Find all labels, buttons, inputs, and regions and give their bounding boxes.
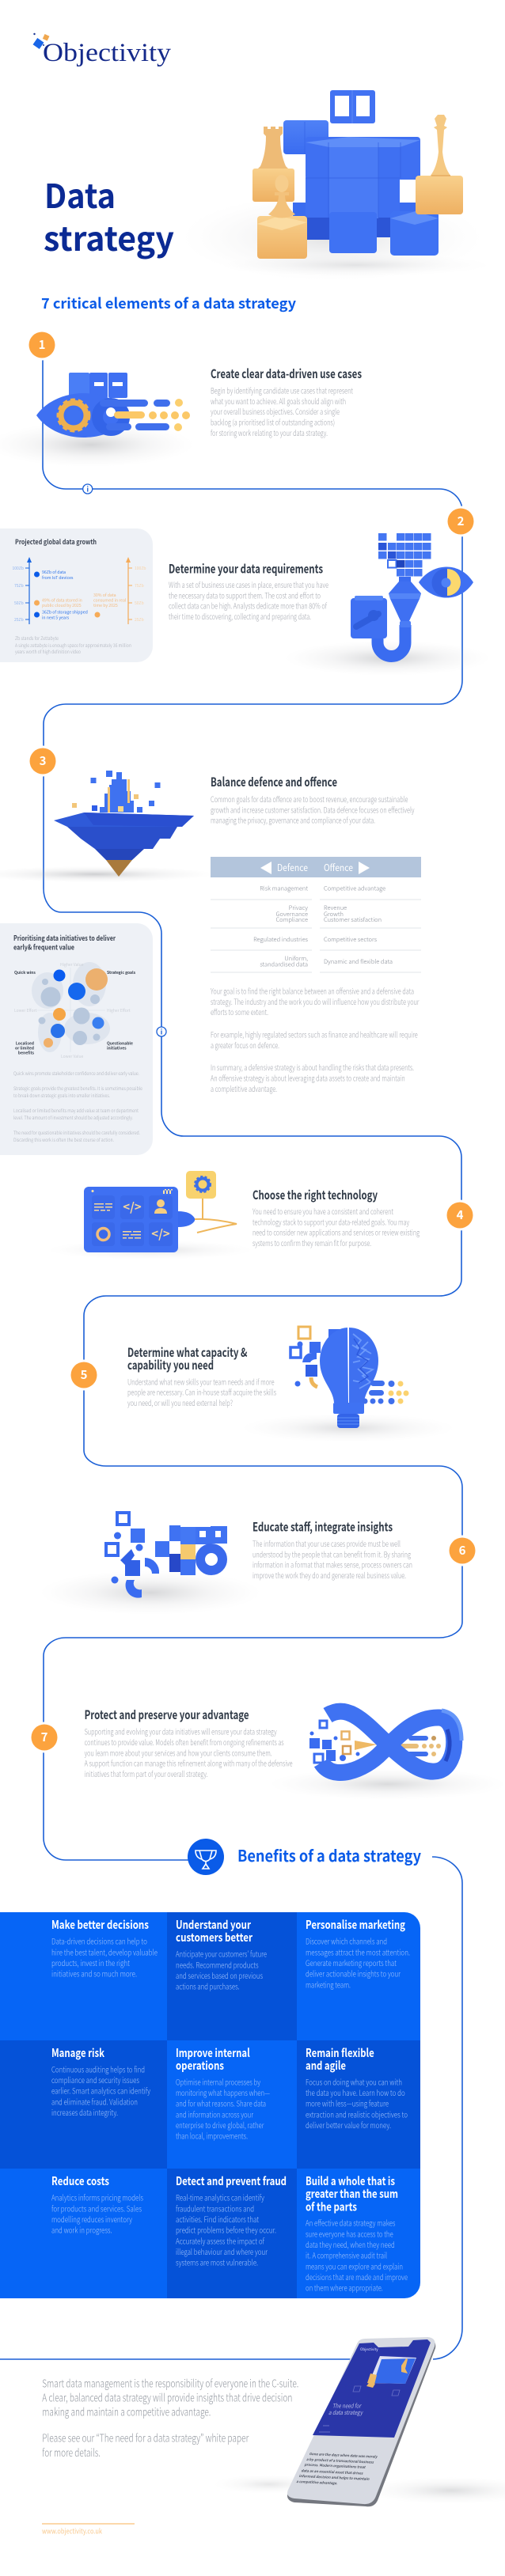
step 4 number <box>445 1199 475 1231</box>
step 3 further text: a greater focus on defence. <box>211 1039 279 1051</box>
benefit: build a whole <box>306 2173 408 2294</box>
step 3 text <box>211 773 415 826</box>
panel: projected global data growth: A single zettabyte is enough space for approximately 36 million <box>15 642 131 649</box>
benefit: improve internal operations: and for what reasons. Share data <box>176 2097 266 2109</box>
step 1 text: Begin by identifying candidate use cases that represent <box>211 385 353 396</box>
panel: benefits grid <box>0 1912 420 2298</box>
chart: left axis: in next 5 years <box>42 616 70 620</box>
benefits heading: Benefits of a data strategy <box>237 1843 421 1866</box>
benefit: make better decisions: Make better decisions <box>51 1916 149 1933</box>
benefit: detect and prevent fraud: predict problems before they occur. <box>176 2224 276 2236</box>
benefit: personalise marketing: deliver actionable insights to your <box>306 1968 401 1979</box>
step 5 number <box>68 1359 100 1391</box>
benefit: manage risk: compliance and security issues <box>51 2074 139 2085</box>
phone mockup with white paper: process. Modern organisations treat <box>304 2463 366 2470</box>
info icon 2: i <box>161 1027 163 1036</box>
step 4 number: 4 <box>457 1207 464 1223</box>
benefit: detect and prevent fraud: illegal behaviour and where your <box>176 2245 268 2257</box>
step 3 further text: Your goal is to find the right balance between an offensive and a defensive data <box>211 984 414 997</box>
bubble chart: benefits <box>18 1051 35 1055</box>
phone mockup with white paper: Gone are the days when data was merely <box>309 2452 378 2460</box>
bubble chart: or limited <box>15 1046 34 1051</box>
step 6 text: understood by the people that can benefit from it. By sharing <box>252 1547 411 1559</box>
step 1 text <box>211 365 362 438</box>
benefit: detect and prevent fraud: fraudulent transactions and <box>176 2202 254 2214</box>
step 7 text: initiatives that form part of your overall strategy. <box>85 1767 208 1779</box>
step 6 text: Educate staff, integrate insights <box>252 1518 393 1536</box>
step 6 text: The information that your use cases provide must be well <box>252 1537 401 1549</box>
step 1 number: 1 <box>39 336 45 353</box>
step 5 text: you need, or will you need external help? <box>127 1396 233 1408</box>
table: defence versus offence: Compliance <box>275 915 308 924</box>
bubble chart: Localised <box>16 1041 34 1046</box>
step 3 text: growth and increase customer satisfaction. Data defence focuses on effectively <box>211 803 415 815</box>
chart: left axis: public cloud by 2025 <box>42 603 82 608</box>
table: defence versus offence: Risk management <box>260 885 308 892</box>
step 4 text: systems to confirm they remain fit for purpose. <box>252 1237 371 1248</box>
benefit: detect and prevent fraud: Detect and prevent fraud <box>176 2173 287 2189</box>
step 3 further text: a completitive advantage. <box>211 1082 277 1094</box>
step 6 number <box>446 1535 478 1566</box>
bubble chart: Higher Value <box>60 962 84 968</box>
chart: left axis: 96Zb of data <box>42 570 66 575</box>
chart: left axis: 100Zb <box>13 566 24 571</box>
benefit: make better decisions: Data-driven decisions can help to <box>51 1934 147 1946</box>
step 3 further text <box>211 984 420 1094</box>
step 2 number: 2 <box>458 513 465 529</box>
benefit: remain flexible and agile: Focus on doing what you can with <box>306 2075 402 2087</box>
step 3 illustration: floating island city <box>0 771 214 882</box>
benefit: remain flexible and agile: more with less—using feature <box>306 2097 389 2109</box>
step 2 number <box>445 506 477 536</box>
chart: right axis: 25Zb <box>135 617 144 623</box>
phone mockup with white paper: a by-product of a transactional business <box>306 2457 374 2465</box>
step 2 text: Determine your data requirements <box>169 560 323 578</box>
phone mockup with white paper: informed decision and helps to maintain <box>298 2474 370 2482</box>
closing text: making and maintain a competitive advantage. <box>42 2404 211 2419</box>
benefit: make better decisions: products, invest in the right <box>51 1957 130 1968</box>
step 5 number: 5 <box>81 1366 88 1383</box>
step 4 text: Choose the right technology <box>252 1186 378 1203</box>
chart: right axis: 50Zb <box>135 600 144 606</box>
benefit: build a whole: of the parts <box>306 2198 357 2214</box>
step 5 illustration: brain light bulb <box>241 1327 455 1442</box>
step 7 number: 7 <box>41 1729 48 1745</box>
step 6 illustration: cubes and donut pieces <box>40 1513 261 1615</box>
step 1 text: your overall business objectives. Consider a single <box>211 405 340 417</box>
step 3 further text: For example, highly regulated sectors such as finance and healthcare will require <box>211 1029 418 1040</box>
benefit: improve internal operations: enterprise to drive global, rather <box>176 2119 264 2131</box>
table: defence versus offence <box>211 857 421 972</box>
benefit: understand your customers better: actions and purchases. <box>176 1980 240 1992</box>
benefit: remain flexible and agile: Remain flexible <box>306 2044 374 2061</box>
step 4 text: You need to ensure you have a consistent and coherent <box>252 1205 393 1217</box>
table: defence versus offence: Uniform, <box>284 954 308 963</box>
benefit: understand your customers better: Understand your <box>176 1916 252 1933</box>
chart: left axis: 49% of data stored in <box>42 598 82 603</box>
benefit: detect and prevent fraud <box>176 2173 287 2268</box>
benefit: improve internal operations: monitoring what happens when— <box>176 2086 270 2098</box>
panel: projected global data growth: Projected global data growth <box>15 537 97 547</box>
step 7 text: A support function can manage this refinement along with many of the defensive <box>85 1757 293 1769</box>
bubble chart: Questionable <box>107 1041 133 1046</box>
title: strategy <box>44 213 174 261</box>
phone mockup with white paper: a competitive advantage. <box>296 2479 338 2486</box>
benefit: detect and prevent fraud: Real-time analytics can identify <box>176 2191 264 2203</box>
benefit: improve internal operations: and information across your <box>176 2108 253 2120</box>
panel: prioritising data initiatives <box>0 923 153 1155</box>
chart: left axis: 25Zb <box>14 617 24 623</box>
benefit: build a whole: Build a whole that is <box>306 2173 395 2189</box>
step 1 text: Create clear data-driven use cases <box>211 365 362 382</box>
step 5 text: Understand what new skills your team needs and if more <box>127 1375 274 1387</box>
section heading: 7 critical elements of a data strategy <box>41 293 297 313</box>
benefit: reduce costs: modelling reduces inventory <box>51 2213 132 2225</box>
table: defence versus offence: Regulated industries <box>253 935 309 944</box>
step 6 text: improve the work they do and generate real business value. <box>252 1569 406 1581</box>
info icon 1 <box>83 484 93 494</box>
benefit: build a whole: sure everyone has access to the <box>306 2227 393 2239</box>
benefit: understand your customers better: customers better <box>176 1929 253 1945</box>
benefit: understand your customers better: Anticipate your customers' future <box>176 1948 267 1960</box>
benefit: remain flexible and agile: and agile <box>306 2057 346 2074</box>
benefit: reduce costs <box>51 2173 143 2236</box>
step 2 text: With a set of business use cases in place, ensure that you have <box>169 578 328 590</box>
step 5 text: Determine what capacity & <box>127 1343 248 1361</box>
panel: prioritising data initiatives: level. The amount of investment should be adjusted accordingly. <box>13 1114 133 1121</box>
benefit: understand your customers better: needs. Recommend products <box>176 1958 259 1970</box>
title <box>44 170 174 261</box>
chart: left axis: from IoT devices <box>42 575 74 581</box>
step 7 text: you learn more about your services and how your clients consume them. <box>85 1746 272 1758</box>
closing text: A clear, balanced data strategy will provide insights that drive decision <box>42 2389 292 2405</box>
benefit: improve internal operations: operations <box>176 2057 224 2074</box>
benefit: personalise marketing: messages attract the most attention. <box>306 1945 410 1957</box>
step 1 text: backlog (a prioritised list of outstanding actions) <box>211 416 335 427</box>
chart: right axis: 30% of data <box>93 593 116 598</box>
benefit: manage risk: and eliminate fraud. Validation <box>51 2095 138 2107</box>
benefit: reduce costs: for products and services. Sales <box>51 2202 142 2214</box>
step 5 text <box>127 1343 276 1408</box>
step 4 illustration: tech panel and plug <box>47 1171 253 1260</box>
benefit: manage risk: Continuous auditing helps to find <box>51 2063 145 2074</box>
phone mockup with white paper: Objectivity <box>360 2347 378 2352</box>
benefit: improve internal operations <box>176 2044 270 2142</box>
step 4 text <box>252 1186 420 1248</box>
benefit: personalise marketing <box>306 1916 410 1990</box>
step 5 text: capability you need <box>127 1356 214 1373</box>
benefit: reduce costs: Analytics informs pricing models <box>51 2191 143 2203</box>
step 7 illustration: infinity loop <box>269 1710 505 1800</box>
step 6 number: 6 <box>459 1542 466 1559</box>
benefit: understand your customers better: and services based on previous <box>176 1969 263 1981</box>
benefit: personalise marketing: Generate marketing reports that <box>306 1957 397 1968</box>
step 3 further text: strategy. The industry and the work you do will influence how you distribute your <box>211 995 420 1007</box>
step 5 text: people are necessary. Can in-house staff acquire the skills <box>127 1386 276 1398</box>
benefit: remain flexible and agile: extraction and realistic objectives to <box>306 2108 408 2120</box>
panel: prioritising data initiatives: early& frequent value <box>13 941 74 953</box>
table: defence versus offence: standardised data <box>260 960 308 968</box>
bubble chart: Lower Value <box>61 1054 84 1059</box>
phone mockup with white paper: data as an essential asset that drives <box>301 2468 363 2476</box>
benefit: detect and prevent fraud: Accurately assess the impact of <box>176 2234 265 2246</box>
benefit: remain flexible and agile: the data you have. Learn how to do <box>306 2086 405 2098</box>
step 3 text: Balance defence and offence <box>211 773 337 790</box>
chart: right axis: 75Zb <box>135 583 144 589</box>
table: defence versus offence: Privacy <box>289 903 308 912</box>
step 3 further text: An offensive strategy is about leveraging data assets to create and maintain <box>211 1071 405 1084</box>
chart: left axis <box>13 557 88 624</box>
panel: prioritising data initiatives: Quick wins promote stakeholder confidence and deliver early value. <box>13 1070 139 1077</box>
info icon 1: i <box>86 484 89 494</box>
footer line and website: www.objectivity.co.uk <box>42 2525 102 2536</box>
panel: projected global data growth <box>0 528 153 662</box>
chart: right axis: consumed in real <box>93 598 127 603</box>
step 1 text: what you want to achieve. All goals should align with <box>211 395 346 407</box>
benefit: remain flexible and agile <box>306 2044 408 2131</box>
step 3 further text: efforts to some extent. <box>211 1006 268 1017</box>
step 4 illustration: tech panel and plug: </> <box>123 1199 142 1215</box>
chart: right axis: 100Zb <box>135 566 146 571</box>
benefit: build a whole: greater than the sum <box>306 2185 398 2202</box>
benefit: reduce costs: Reduce costs <box>51 2173 109 2189</box>
benefit: manage risk: Manage risk <box>51 2044 104 2061</box>
step 4 illustration: tech panel and plug: </> <box>151 1225 170 1242</box>
step 4 text: technology stack to support your data-related goals. You may <box>252 1215 409 1227</box>
bubble chart: Higher Effort <box>107 1008 131 1013</box>
panel: projected global data growth: Zb stands for Zettabyte <box>15 635 59 642</box>
info icon 2 <box>157 1027 166 1036</box>
table: defence versus offence: Growth <box>324 910 344 919</box>
step 1 illustration: eye, gear and data bars <box>0 373 194 467</box>
step 7 text: continues to provide value. Models often benefit from ongoing refinements as <box>85 1736 284 1748</box>
benefit: improve internal operations: than local, improvements. <box>176 2130 248 2142</box>
closing text: for more details. <box>42 2444 101 2460</box>
table: defence versus offence: Dynamic and flexible data <box>324 957 393 966</box>
benefit: personalise marketing: marketing team. <box>306 1978 351 1990</box>
panel: prioritising data initiatives: The need for questionable initiatives should be carefully considered. <box>13 1129 140 1136</box>
table: defence versus offence: Customer satisfaction <box>324 915 382 924</box>
benefit: build a whole: means you can explore and explain <box>306 2260 403 2271</box>
table: defence versus offence: Revenue <box>324 903 347 912</box>
panel: prioritising data initiatives: Prioritising data initiatives to deliver <box>13 933 116 943</box>
benefit: build a whole: it. A comprehensive audit trail <box>306 2249 387 2261</box>
benefit: personalise marketing: Discover which channels and <box>306 1934 387 1946</box>
step 7 number <box>28 1722 60 1753</box>
closing text <box>42 2375 298 2460</box>
step 7 text: Supporting and evolving your data initiatives will ensure your data strategy <box>85 1725 277 1737</box>
closing text: Smart data management is the responsibility of everyone in the C-suite. <box>42 2375 298 2391</box>
phone mockup with white paper: The need for <box>332 2402 362 2410</box>
benefit: manage risk: increases data integrity. <box>51 2106 118 2118</box>
step 3 text: managing the privacy, governance and compliance of your data. <box>211 814 375 826</box>
step 3 number <box>27 745 59 777</box>
benefit: detect and prevent fraud: systems are most vulnerable. <box>176 2256 258 2268</box>
benefit: detect and prevent fraud: activities. Find indicators that <box>176 2213 259 2225</box>
benefit: make better decisions <box>51 1916 158 1979</box>
chart: left axis: 50Zb <box>14 600 24 606</box>
table: defence versus offence: Competitive sectors <box>324 935 378 944</box>
benefit: manage risk: earlier. Smart analytics can identify <box>51 2085 150 2097</box>
benefit: improve internal operations: Improve internal <box>176 2044 250 2061</box>
panel: prioritising data initiatives: to break down strategic goals into smaller initiatives. <box>13 1092 110 1099</box>
benefit: build a whole: decisions that are made and improve <box>306 2271 408 2282</box>
panel: prioritising data initiatives: Strategic goals provide the greatest benefits. It is sometimes possible <box>13 1085 142 1092</box>
table: defence versus offence: Governance <box>275 910 308 919</box>
bubble chart: initiatives <box>107 1046 127 1051</box>
phone mockup with white paper: a data strategy <box>328 2408 363 2417</box>
benefit: remain flexible and agile: deliver better value for money. <box>306 2119 391 2131</box>
footer line and website <box>42 2524 135 2536</box>
benefit: build a whole: An effective data strategy makes <box>306 2217 396 2229</box>
benefit: build a whole: on them where appropriate. <box>306 2282 383 2294</box>
connecting timeline <box>0 358 462 2359</box>
hero illustration: blocks and chess pieces <box>182 90 491 281</box>
bubble chart <box>14 962 136 1059</box>
step 7 text: Protect and preserve your advantage <box>85 1706 249 1723</box>
panel: prioritising data initiatives: Localised or limited benefits may add value at team or department <box>13 1107 139 1114</box>
step 2 text: their time to discovering, collecting and preparing data. <box>169 610 311 622</box>
chart: left axis: 36Zb of storage shipped <box>42 609 88 616</box>
step 6 text: information in a format that makes sense, process owners can <box>252 1559 412 1570</box>
bubble chart: Strategic goals <box>107 970 136 975</box>
benefit: reduce costs: and work in progress. <box>51 2224 112 2236</box>
bubble chart: Quick wins <box>14 970 36 975</box>
benefits trophy icon <box>188 1839 224 1875</box>
table: defence versus offence: Offence <box>324 861 353 874</box>
chart: right axis: time by 2025 <box>93 603 118 608</box>
step 6 text <box>252 1518 412 1581</box>
benefit: improve internal operations: Optimise internal processes by <box>176 2075 260 2087</box>
step 3 number: 3 <box>40 752 46 769</box>
step 3 text: Common goals for data offence are to boost revenue, encourage sustainable <box>211 793 408 805</box>
benefit: manage risk <box>51 2044 150 2118</box>
step 3 further text: In summary, a defensive strategy is about handling the risks that data presents. <box>211 1061 414 1073</box>
step 4 text: need to consider new applications and services or review existing <box>252 1226 420 1238</box>
closing text: Please see our “The need for a data strategy” white paper <box>42 2429 249 2445</box>
step 2 illustration: data funnel, eye and pipe <box>285 533 491 676</box>
logo: Objectivity <box>43 39 172 67</box>
chart: right axis <box>93 557 146 624</box>
phone mockup with white paper <box>214 2337 505 2506</box>
benefit: build a whole: data they need, when they need <box>306 2238 395 2250</box>
table: defence versus offence: Competitive advantage <box>324 885 385 892</box>
step 1 number <box>27 329 57 361</box>
step 1 text: for storing work relating to your data strategy. <box>211 426 328 438</box>
bubble chart: Lower Effort <box>14 1008 37 1013</box>
step 2 text <box>169 560 328 622</box>
benefit: make better decisions: hire the best talent, develop valuable <box>51 1945 158 1957</box>
chart: left axis: 75Zb <box>14 583 24 589</box>
title: Data <box>44 170 116 218</box>
benefit: understand your customers better <box>176 1916 267 1992</box>
step 2 text: the necessary data to support them. The cost and effort to <box>169 589 321 600</box>
benefit: personalise marketing: Personalise marketing <box>306 1916 405 1933</box>
benefit: make better decisions: initiatives and so much more. <box>51 1968 137 1979</box>
step 7 text <box>85 1706 293 1779</box>
panel: projected global data growth: years worth of high definition video <box>15 648 81 655</box>
step 2 text: collect data can be high. Analysts dedicate more than 80% of <box>169 600 328 611</box>
table: defence versus offence: Defence <box>277 861 308 874</box>
panel: prioritising data initiatives: Discarding this work is often the best course of action. <box>13 1136 114 1143</box>
